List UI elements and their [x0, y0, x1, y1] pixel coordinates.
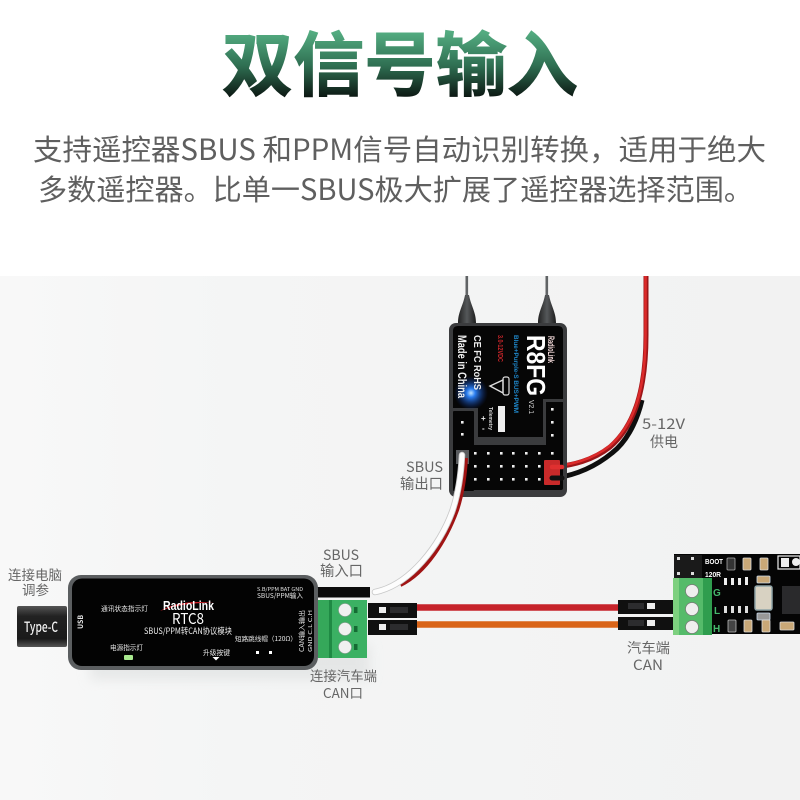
- label: car CAN port: CAN口: [323, 682, 363, 702]
- module shadow: [90, 645, 370, 680]
- CAN adapter board: [674, 554, 800, 635]
- left dupont connectors: [368, 603, 417, 635]
- module small labels: 升级按键: [203, 647, 230, 657]
- module small labels: [76, 586, 314, 657]
- module small labels: 电源指示灯: [110, 642, 143, 652]
- label: SBUS output: SBUS: [406, 456, 443, 477]
- power LED: [124, 655, 133, 660]
- receiver R8FG: Made in China: [455, 335, 467, 398]
- label: car CAN: [627, 638, 670, 675]
- receiver R8FG: [449, 323, 567, 497]
- receiver R8FG: Telemetry: [487, 407, 493, 431]
- label: connect to PC: [8, 564, 62, 599]
- module small labels: CAN输入输出: [296, 610, 306, 652]
- receiver R8FG: -: [482, 424, 485, 433]
- antenna right: [538, 276, 556, 323]
- receiver R8FG: R8FG: [521, 335, 551, 396]
- label: connect to PC: 连接电脑: [8, 564, 62, 584]
- photo background panel: [0, 276, 800, 800]
- CAN adapter board: 120R: [705, 572, 721, 579]
- description text: [33, 127, 766, 209]
- RTC8 module: [68, 575, 318, 670]
- label: SBUS output: 输出口: [400, 473, 443, 494]
- description text: 多数遥控器。比单一SBUS极大扩展了遥控器选择范围。: [38, 167, 753, 209]
- label: power supply: 供电: [650, 431, 678, 452]
- jumper dots: [256, 651, 259, 654]
- blue status glow: [454, 376, 488, 410]
- SBUS input header: [317, 587, 370, 598]
- module name: RTC8: [172, 608, 204, 629]
- CAN adapter board: G: [713, 588, 721, 599]
- receiver pin grid: [461, 408, 554, 481]
- SBUS servo cable: [375, 450, 469, 592]
- module small labels: 短路跳线帽（120Ω）: [235, 633, 297, 643]
- receiver R8FG: Blue+Purple-S BUS+PWM: [512, 335, 519, 413]
- label: SBUS output: [400, 456, 443, 494]
- wire: receiver power: [556, 276, 646, 478]
- upgrade button marker: [212, 657, 220, 660]
- module logo: RadioLink: [163, 599, 214, 613]
- right dupont connectors: [618, 600, 674, 630]
- Type-C plug: [17, 606, 67, 647]
- receiver R8FG: 3.0-12VDC: [496, 335, 503, 362]
- CAN adapter board: BOOT: [705, 559, 724, 566]
- right green terminal block: [673, 578, 712, 635]
- module small labels: 通讯状态指示灯: [101, 603, 148, 613]
- label: car CAN port: [310, 665, 377, 702]
- module small labels: USB: [76, 615, 86, 629]
- label: SBUS input: [320, 544, 363, 581]
- antenna left: [458, 276, 476, 323]
- receiver R8FG: +: [481, 414, 486, 423]
- label: SBUS input: SBUS: [323, 544, 359, 565]
- label: car CAN: CAN: [633, 655, 663, 675]
- left green terminal block: [318, 600, 367, 658]
- description text: 支持遥控器SBUS 和PPM信号自动识别转换，适用于绝大: [33, 127, 766, 169]
- Type-C plug: Type-C: [24, 617, 58, 637]
- label: SBUS input: 输入口: [320, 560, 363, 581]
- receiver R8FG: CE FC RoHS: [471, 335, 482, 390]
- label: car CAN: 汽车端: [627, 638, 670, 658]
- title: 双信号输入: [222, 10, 578, 111]
- CAN adapter board: L: [714, 606, 720, 617]
- power connector: [544, 460, 562, 485]
- label: power supply: 5-12V: [642, 413, 686, 434]
- label: connect to PC: 调参: [22, 579, 49, 599]
- CAN wire pair: [415, 608, 620, 624]
- CAN adapter board: H: [713, 624, 720, 635]
- module subtitle: SBUS/PPM转CAN协议模块: [144, 625, 233, 637]
- label: car CAN port: 连接汽车端: [310, 665, 377, 685]
- module small labels: S.B/PPM BAT GND: [257, 586, 304, 593]
- module small labels: GND C.L C.H: [306, 610, 314, 652]
- receiver R8FG: V2.1: [527, 400, 536, 414]
- receiver labels: RadioLink: [545, 336, 556, 363]
- module small labels: SBUS/PPM输入: [257, 590, 303, 600]
- label: power supply: [642, 413, 686, 452]
